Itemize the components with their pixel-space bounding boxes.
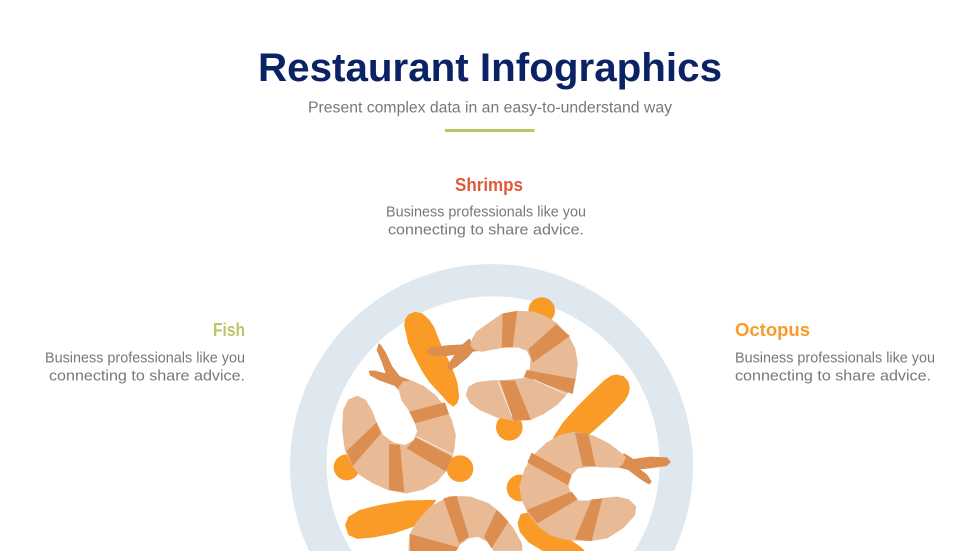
shrimp: right: [507, 432, 670, 541]
text block: Octopus: Octopus: [735, 320, 810, 340]
text block: Shrimps: [386, 175, 586, 238]
text block: Fish: connecting to share advice.: [49, 368, 245, 384]
text block: Fish: [45, 320, 245, 384]
title underline: [445, 129, 534, 132]
text block: Shrimps: Business professionals like you: [386, 204, 586, 220]
text block: Fish: Fish: [213, 320, 245, 340]
garnish: orange strips: [346, 313, 629, 550]
subtitle: Present complex data in an easy-to-understand way: [308, 100, 672, 116]
shrimp: bottom: [409, 496, 522, 551]
food illustration: [334, 297, 670, 551]
plate: [290, 264, 693, 551]
text block: Octopus: [735, 320, 935, 384]
shrimp: left: [334, 344, 473, 493]
shrimp: top: [427, 297, 577, 441]
text block: Octopus: Business professionals like you: [735, 350, 935, 366]
text block: Octopus: connecting to share advice.: [735, 368, 931, 384]
text block: Shrimps: Shrimps: [455, 175, 523, 195]
title: Restaurant Infographics: [258, 46, 722, 90]
text block: Shrimps: connecting to share advice.: [388, 222, 584, 238]
text block: Fish: Business professionals like you: [45, 350, 245, 366]
